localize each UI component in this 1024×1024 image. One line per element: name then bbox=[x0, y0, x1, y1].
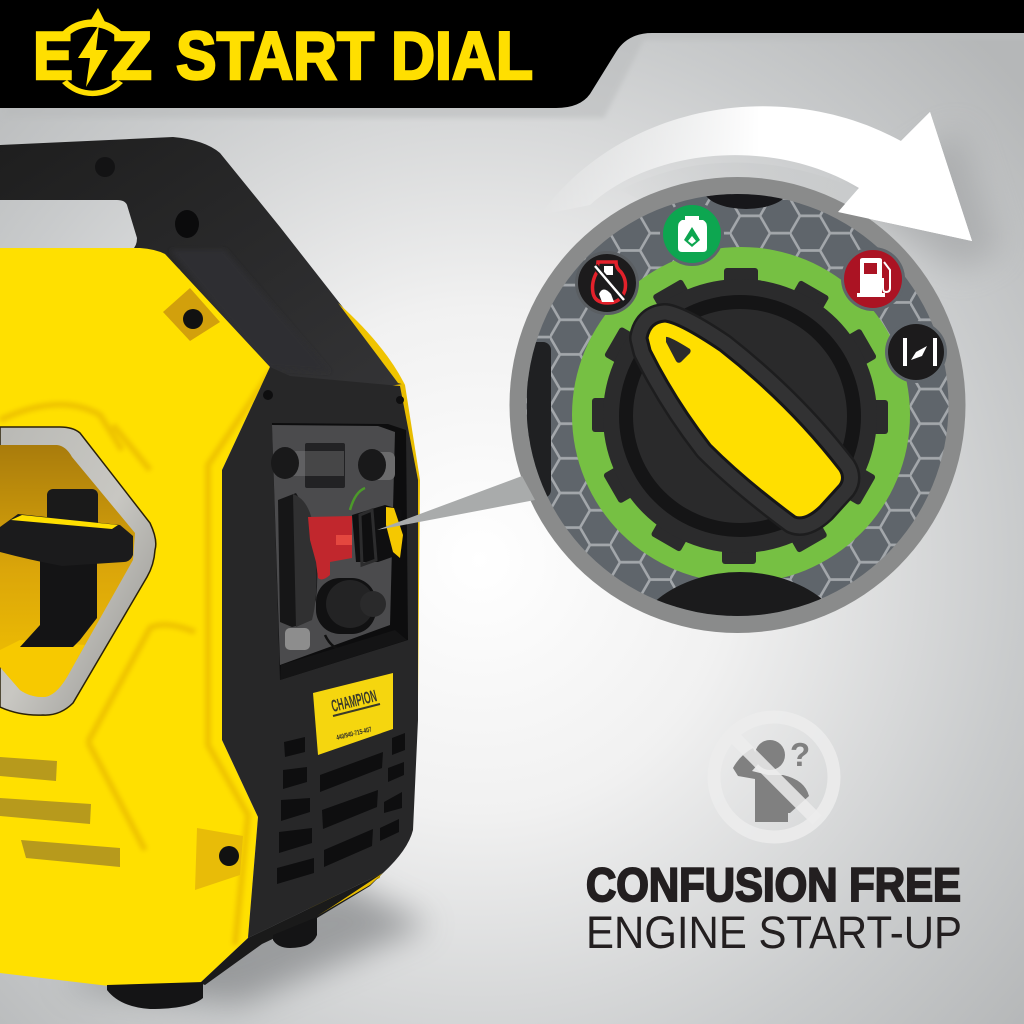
screw: upper bbox=[183, 309, 203, 329]
recess lower lip bbox=[0, 640, 85, 697]
side slot bbox=[527, 342, 551, 498]
curved arrow bbox=[540, 106, 1000, 270]
control plate bbox=[272, 425, 395, 665]
recess well bbox=[0, 445, 135, 697]
product label bbox=[313, 673, 393, 755]
screw: lower bbox=[219, 846, 239, 866]
title logo: EZ: Z bbox=[111, 18, 152, 94]
oil display bbox=[305, 443, 345, 488]
yellow body bbox=[0, 248, 270, 992]
rear yellow trim bbox=[300, 306, 420, 910]
question mark: ? bbox=[790, 736, 810, 773]
wire bbox=[325, 635, 345, 650]
oil display lights bbox=[280, 451, 344, 476]
handle highlight bbox=[170, 250, 330, 372]
product label: CHAMPION bbox=[329, 686, 379, 716]
dial handle bbox=[647, 321, 842, 518]
control recess bbox=[272, 423, 408, 680]
right knob bbox=[358, 449, 395, 481]
caption bold line: CONFUSION FREE bbox=[586, 858, 961, 911]
red parallel port bbox=[308, 516, 352, 579]
underside yellow trim bbox=[317, 873, 383, 916]
side panel bbox=[222, 367, 418, 938]
bottom knob bbox=[656, 572, 822, 616]
screw hole: handle bbox=[175, 210, 199, 238]
left outlet cover bbox=[278, 493, 317, 627]
title logo: EZ bbox=[33, 8, 152, 96]
recess lower ledge bbox=[280, 630, 407, 680]
icon: no gas bbox=[575, 251, 639, 315]
confusion icon bbox=[714, 717, 834, 837]
hexagon panel bbox=[526, 194, 948, 616]
dial magnifier bbox=[510, 112, 972, 633]
rear vents bbox=[277, 733, 405, 884]
large outlet bbox=[316, 578, 386, 634]
mini dial bbox=[352, 505, 403, 565]
dial body bbox=[592, 268, 888, 564]
caption regular line: ENGINE START-UP bbox=[586, 907, 962, 958]
left knob bbox=[271, 447, 299, 479]
screw: handle top bbox=[95, 157, 115, 177]
handle bbox=[0, 137, 402, 400]
generator bbox=[0, 137, 420, 1009]
outlet lid bbox=[293, 494, 317, 627]
icon: gasoline pump bbox=[841, 247, 905, 311]
dial green indicator bbox=[350, 488, 365, 510]
product label: 440/940-715-407 bbox=[336, 726, 372, 742]
pull handle recess rim bbox=[0, 427, 156, 715]
green ring bbox=[572, 247, 910, 583]
title logo: EZ: E bbox=[33, 18, 73, 94]
arrow head overlap bbox=[838, 112, 972, 241]
magnifier ring bbox=[510, 177, 966, 633]
prohibition sign bbox=[714, 717, 834, 837]
screw mount: upper bbox=[163, 288, 220, 341]
caption bbox=[586, 858, 962, 958]
foot: front bbox=[107, 982, 203, 1009]
top yellow trim bbox=[338, 303, 405, 385]
body rib lines bbox=[0, 370, 272, 945]
header banner bbox=[0, 0, 1024, 118]
panel screw: left bbox=[263, 390, 273, 400]
pull handle bbox=[0, 514, 133, 647]
top knob bbox=[706, 194, 783, 209]
panel screw: right bbox=[396, 396, 404, 404]
icon: propane bbox=[660, 202, 724, 266]
ground screw bbox=[285, 628, 310, 650]
screw mount: lower bbox=[195, 828, 243, 890]
floor shadow bbox=[60, 880, 430, 1005]
icon: choke bbox=[885, 321, 947, 383]
body vents bbox=[0, 757, 120, 867]
mount plate bbox=[47, 489, 98, 549]
underside bbox=[200, 873, 383, 985]
person bbox=[733, 740, 809, 822]
callout beam bbox=[377, 476, 535, 530]
title text: START DIAL bbox=[176, 18, 533, 94]
foot: rear bbox=[273, 917, 317, 948]
